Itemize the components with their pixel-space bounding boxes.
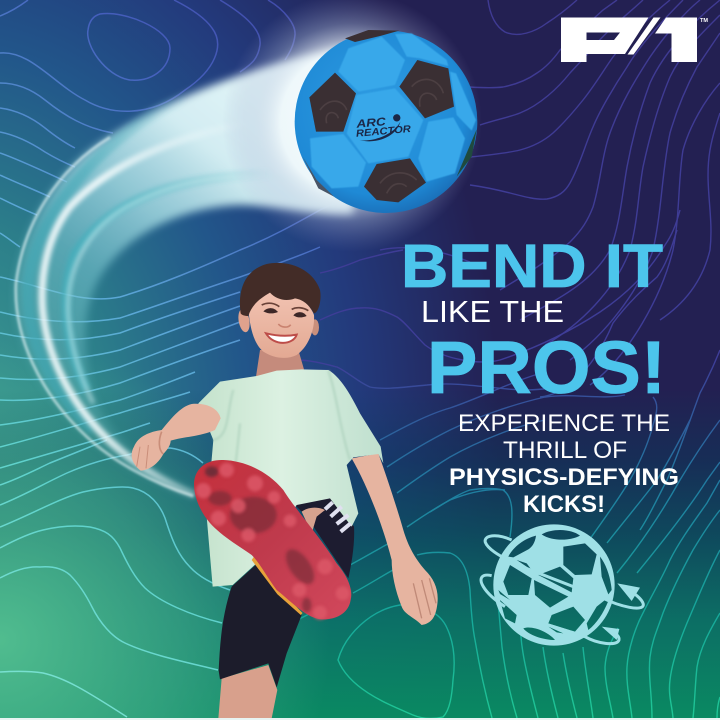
subheading line 3: PHYSICS-DEFYING — [449, 464, 679, 491]
boy: head — [237, 308, 251, 333]
shoe: studs — [196, 463, 350, 620]
headline line: like the: LIKE THE — [421, 294, 564, 329]
logo: numeral 1 — [655, 18, 697, 62]
boy: neck — [256, 350, 304, 377]
boy: right arm — [352, 453, 438, 625]
boy: fingers — [413, 578, 436, 618]
ball logo: Arc Reactor: ARC — [355, 116, 387, 131]
icon: ball with cut-out panels — [493, 524, 615, 646]
boy: shirt — [198, 369, 383, 587]
glow behind the ball — [222, 0, 482, 252]
icon: orbit rings — [481, 536, 643, 644]
boy: eyes and eyebrows — [263, 308, 278, 313]
shoe: dirt patches — [205, 466, 320, 612]
headline — [401, 232, 666, 409]
icon: soccer ball with orbit arrows — [481, 524, 643, 646]
ball panel swirls — [320, 79, 443, 193]
boy kicking toward the viewer — [132, 263, 438, 718]
ball panels: blue — [310, 33, 476, 188]
subheading line 2: THRILL OF — [503, 437, 627, 464]
background contour lines: left and centre — [0, 0, 400, 717]
boy: nose and smile — [278, 324, 291, 327]
background contour lines: right side — [297, 0, 720, 718]
logo: letter P — [561, 18, 648, 62]
boy: left arm and fist — [132, 404, 221, 471]
P1 logo — [561, 18, 708, 62]
boy: shoe sole facing camera — [253, 555, 302, 614]
ball logo: Arc Reactor: REACTOR — [356, 124, 412, 140]
subheading line 1: EXPERIENCE THE — [458, 410, 670, 437]
boy: shirt folds — [213, 371, 350, 513]
motion trail: curved light swoosh behind the ball — [16, 47, 353, 497]
boy: thigh and short stripes — [302, 508, 325, 533]
headline line: Pros: PROS! — [427, 326, 666, 409]
subheading line 4: KICKS! — [523, 491, 605, 518]
ball panels: black — [303, 30, 477, 202]
soccer ball — [295, 30, 477, 213]
boy: standing leg — [218, 665, 277, 718]
boy: hair — [240, 263, 321, 316]
ball logo: Arc Reactor — [355, 113, 412, 143]
logo: slash — [628, 18, 660, 54]
subheading text — [449, 410, 679, 518]
icon: arrowheads — [617, 583, 640, 601]
bottom edge strip — [0, 718, 720, 720]
logo: trademark: TM — [700, 18, 708, 24]
headline line: Bend it: BEND IT — [401, 232, 663, 300]
boy: shorts — [219, 563, 302, 687]
